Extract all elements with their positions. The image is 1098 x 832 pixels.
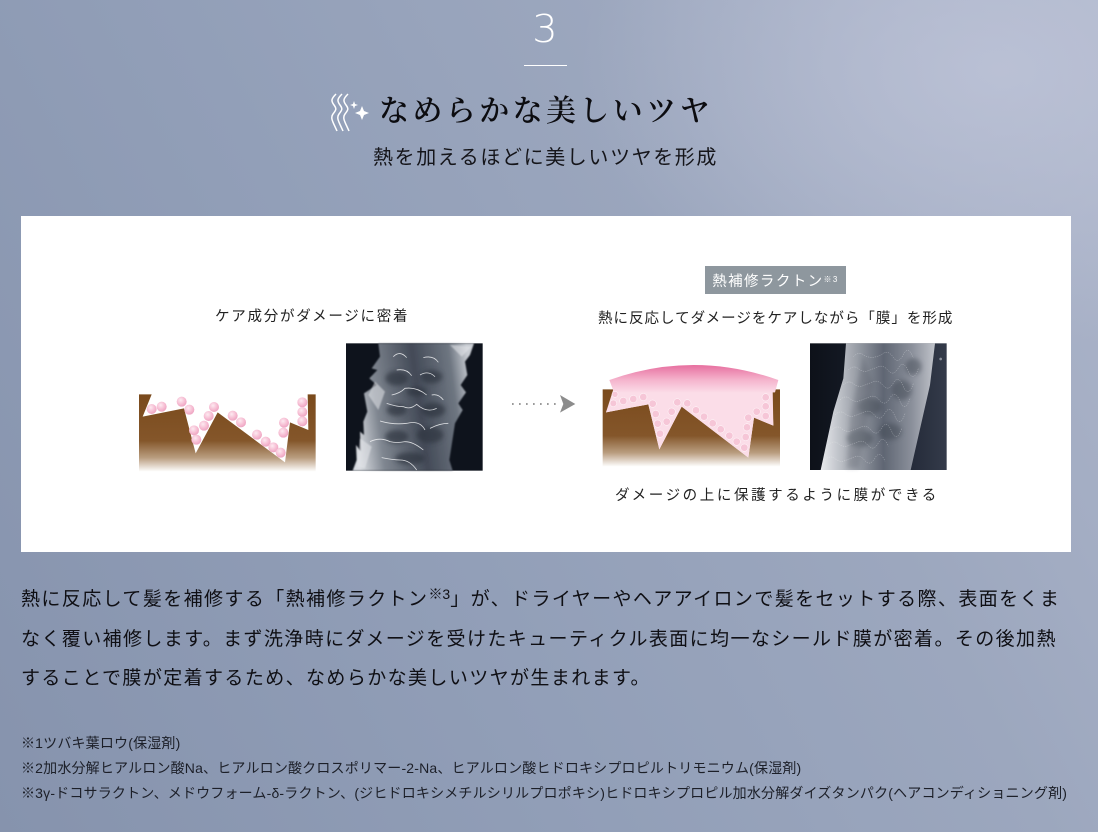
left caption: ケア成分がダメージに密着 (215, 309, 409, 325)
brown hair cross-section (139, 394, 316, 472)
number underline (524, 65, 567, 66)
step number: 3 (532, 7, 558, 51)
title: なめらかな美しいツヤ (379, 95, 713, 128)
pink ingredient particles (147, 397, 307, 458)
footnotes: ※1ツバキ葉ロウ(保湿剤) (21, 735, 180, 751)
panel: comparison (21, 216, 1071, 552)
arrow: dotted (512, 343, 947, 470)
footnotes (21, 735, 1067, 801)
micrograph: repaired hair (810, 343, 947, 470)
badge: heat repair lactone (705, 266, 846, 294)
footnotes: ※3γ-ドコサラクトン、メドウフォーム-δ-ラクトン、(ジヒドロキシメチルシリルプロポキシ)ヒドロキシプロピル加水分解ダイズタンパク(ヘアコンディショニング剤) (21, 785, 1067, 801)
bottom right caption: ダメージの上に保護するように膜ができる (615, 488, 939, 504)
diagram: repaired hair with film (603, 365, 780, 467)
diagram: damaged hair with care ingredients (139, 342, 483, 472)
body text (21, 586, 1060, 689)
footnotes: ※2加水分解ヒアルロン酸Na、ヒアルロン酸クロスポリマー-2-Na、ヒアルロン酸ヒドロキシプロピルトリモニウム(保湿剤) (21, 760, 801, 776)
body text: 熱に反応して髪を補修する「熱補修ラクトン※3」が、ドライヤーやヘアアイロンで髪をセットする際、表面をくま (21, 586, 1060, 610)
body text: なく覆い補修します。まず洗浄時にダメージを受けたキューティクル表面に均一なシールド膜が密着。その後加熱 (21, 628, 1057, 650)
micrograph: damaged hair (346, 343, 483, 471)
icon: waves and sparkles (331, 94, 369, 132)
badge: heat repair lactone: 熱補修ラクトン※3 (712, 274, 839, 290)
subtitle: 熱を加えるほどに美しいツヤを形成 (373, 147, 718, 169)
body text: することで膜が定着するため、なめらかな美しいツヤが生まれます。 (21, 668, 651, 689)
right caption: 熱に反応してダメージをケアしながら「膜」を形成 (598, 311, 953, 327)
